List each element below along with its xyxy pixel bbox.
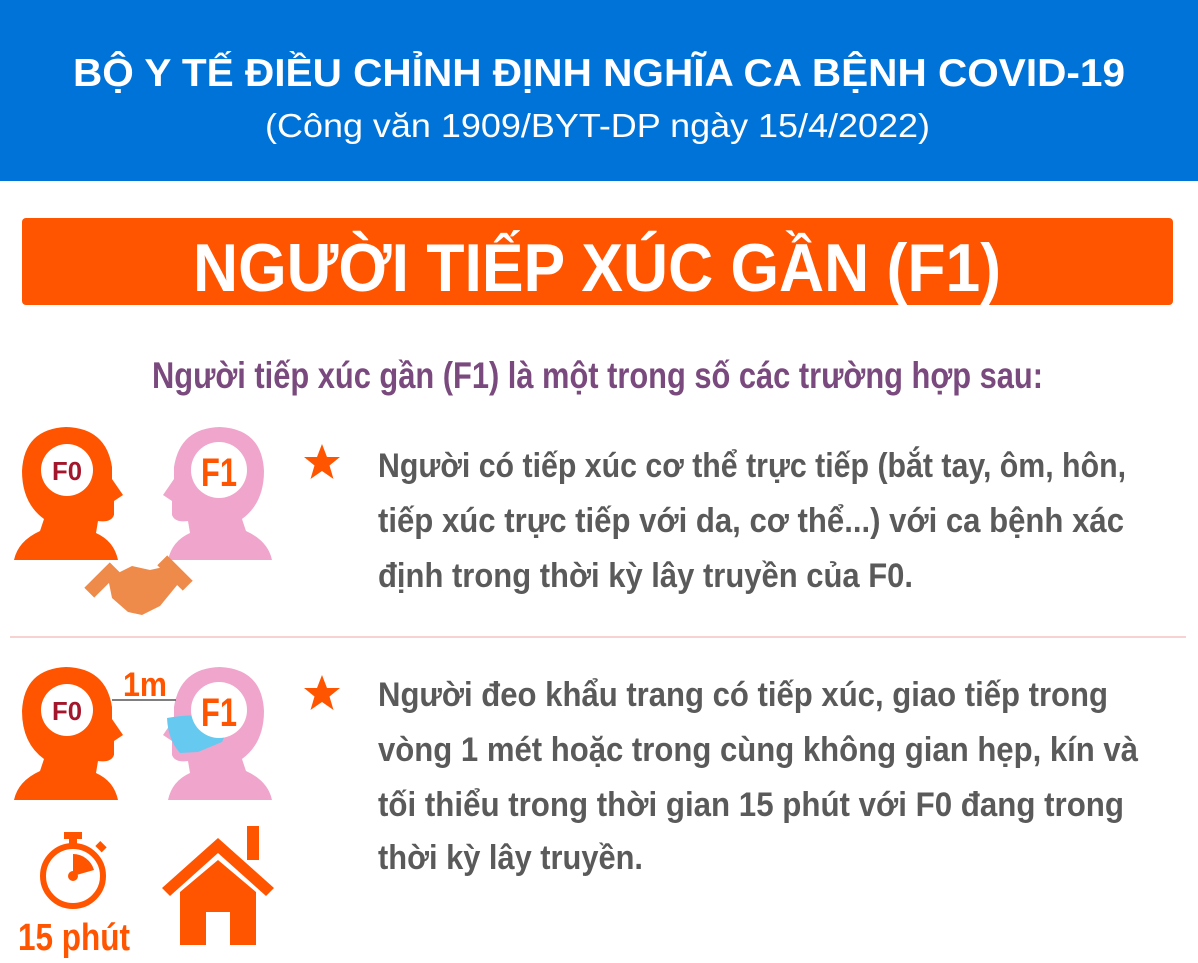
orange banner — [22, 218, 1173, 306]
head F1 — [163, 427, 272, 560]
icon: handshake contact: F1 — [201, 451, 237, 495]
head F0 — [14, 667, 123, 800]
head F0: F0 — [52, 696, 82, 726]
star bullet 2 — [304, 675, 340, 710]
head F1 with mask: F1 — [201, 691, 237, 735]
text block 2 — [378, 676, 1138, 877]
label 15 phut: 15 phút — [18, 917, 130, 959]
1m line — [112, 699, 176, 701]
text block 1 — [378, 447, 1126, 595]
head F0 — [14, 427, 123, 560]
icon: stopwatch 15 phut — [18, 832, 130, 959]
text block 1: Người có tiếp xúc cơ thể trực tiếp (bắt tay, ôm, hôn, — [378, 447, 1126, 485]
icon: house — [162, 826, 274, 945]
text block 2: vòng 1 mét hoặc trong cùng không gian hẹp, kín và — [378, 731, 1138, 769]
star bullet 1 — [304, 444, 340, 479]
head F1 with mask — [163, 667, 272, 800]
text block 1: định trong thời kỳ lây truyền của F0. — [378, 557, 913, 595]
banner heading: NGƯỜI TIẾP XÚC GẦN (F1) — [193, 229, 1001, 306]
handshake — [84, 555, 193, 615]
head F0: F0 — [52, 456, 82, 486]
icon: 1m distance with mask — [14, 666, 272, 800]
icon: handshake contact — [14, 427, 272, 615]
text block 2: tối thiểu trong thời gian 15 phút với F0 đang trong — [378, 786, 1124, 824]
header band — [0, 0, 1198, 181]
text block 1: tiếp xúc trực tiếp với da, cơ thể...) với ca bệnh xác — [378, 502, 1124, 540]
icon: 1m distance with mask: 1m — [123, 666, 167, 704]
text block 2: Người đeo khẩu trang có tiếp xúc, giao tiếp trong — [378, 676, 1108, 714]
text block 2: thời kỳ lây truyền. — [378, 839, 643, 877]
title: BỘ Y TẾ ĐIỀU CHỈNH ĐỊNH NGHĨA CA BỆNH COVID-19 — [73, 50, 1125, 95]
subtitle: (Công văn 1909/BYT-DP ngày 15/4/2022) — [265, 107, 930, 144]
intro text: Người tiếp xúc gần (F1) là một trong số các trường hợp sau: — [152, 355, 1043, 396]
